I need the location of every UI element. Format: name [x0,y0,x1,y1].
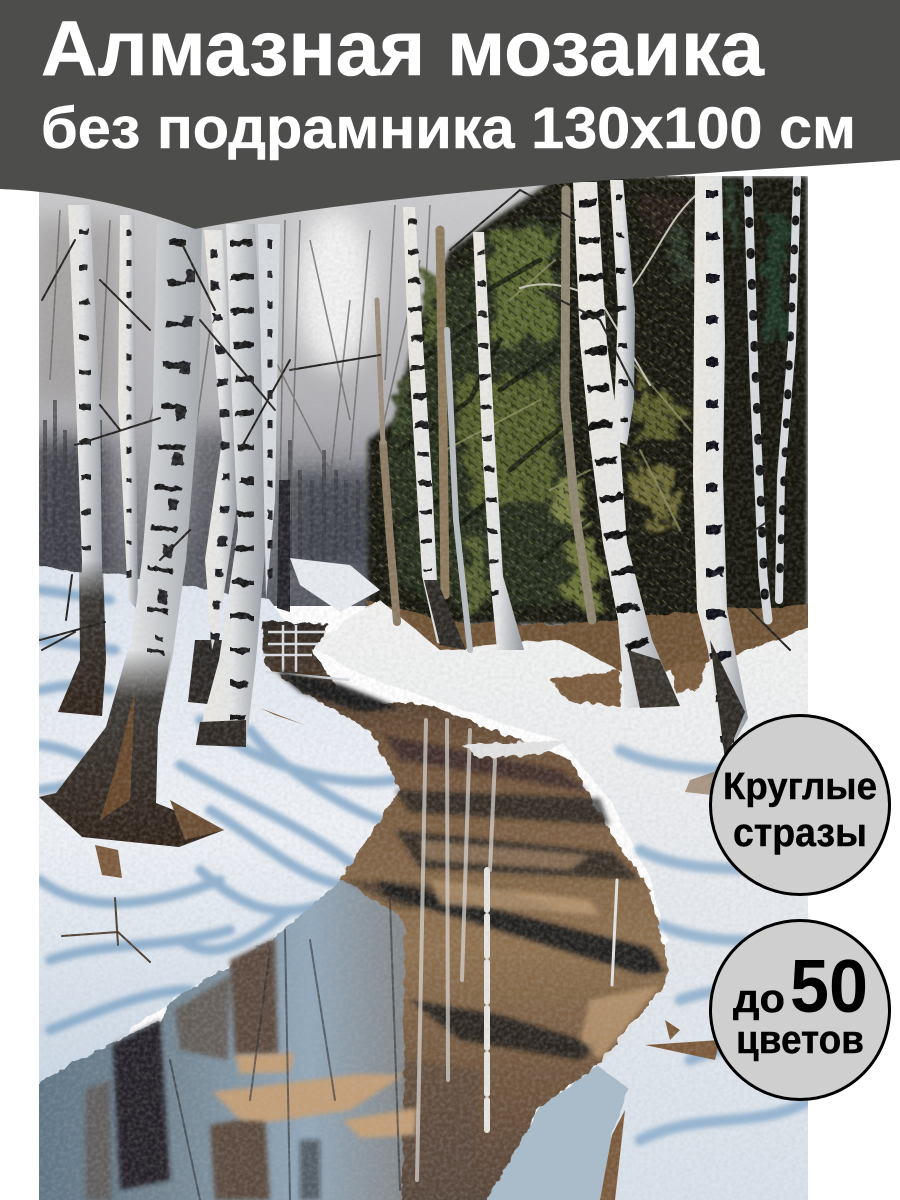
badge text line one: Круглые [723,766,877,808]
brown ground under forest [365,600,808,672]
slender far right birches [748,178,797,620]
slim left birch [118,215,138,610]
badge prefix: до [733,977,785,1021]
dark brown reflected patches [85,938,480,1200]
badge: round rhinestones [710,716,890,894]
banner shape [0,0,900,229]
badge: up to 50 colours [710,920,890,1100]
badge number: 50 [790,944,868,1028]
painting: birch forest with spring stream [20,176,815,1200]
snow shadow stripes [40,590,810,1140]
stream water [25,620,668,1200]
header banner [0,0,900,229]
spruce foliage [386,182,789,610]
needle texture [372,176,700,626]
reflected birch trunks [170,720,617,1200]
left far birch [58,205,106,716]
lower water blue reflection [25,880,405,1200]
distant snow clearing [290,558,380,612]
dark thin trunk in clearing [277,480,290,612]
left snow bank [20,565,410,1095]
dark forest [368,176,808,625]
badge text colours: цветов [736,1018,864,1062]
icy shallows [470,1068,628,1200]
top stream silver streaks [262,625,350,680]
badge text line two: стразы [733,811,867,855]
right snow bank [310,600,815,1200]
large right birch [573,182,680,708]
dark water bands [113,670,665,1200]
paint grain [39,176,808,1200]
misty sky background [30,176,579,606]
birch by spruce one [403,207,466,650]
fallen leaves on snow [95,708,720,1200]
title: Алмазная мозаика [41,4,765,92]
spruce branch strokes [370,190,702,560]
distant thin trunks [43,205,431,570]
birch by spruce two [473,232,524,650]
thin brown trunks [377,190,592,650]
ice floe on water [462,740,570,758]
far right birch [693,176,748,760]
upper water brown reflection [262,620,668,1200]
big foreground birch [39,222,224,847]
brown patches on right snow [550,662,705,706]
bare branches [40,190,790,962]
central birch pair [196,224,280,747]
birch beside right birch [610,180,635,445]
trunk behind centre birch [188,640,222,705]
light brown water patches [213,840,660,1138]
subtitle: без подрамника 130х100 см [41,96,856,161]
